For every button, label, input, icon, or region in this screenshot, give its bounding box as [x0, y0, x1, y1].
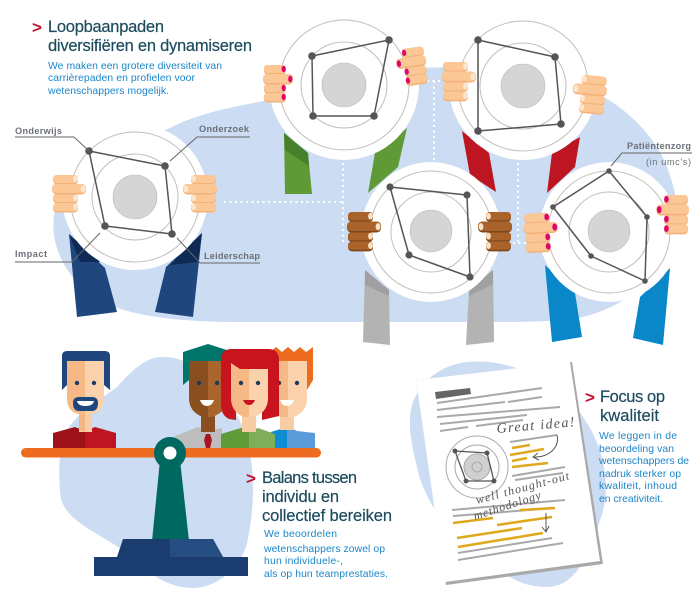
- text: balance body: hun individuele-,: [264, 556, 343, 567]
- figure: man with tie: [175, 344, 233, 448]
- heading: balance: Balans tussen: [262, 469, 357, 487]
- text: career paths body: [47, 61, 222, 97]
- heading: quality: >: [585, 388, 595, 407]
- text: balance body: We beoordelen: [264, 529, 337, 540]
- text: career paths body: wetenschappers mogelijk.: [47, 86, 169, 97]
- document: [416, 362, 603, 585]
- handwritten notes: [472, 415, 575, 532]
- label: Patiëntenzorg: (in umc's): [646, 157, 691, 167]
- panel: arms: [69, 128, 670, 345]
- handwritten notes: well thought-out: [474, 468, 571, 507]
- mini radar chart: [446, 436, 508, 498]
- label: Onderwijs: Onderwijs: [15, 126, 62, 136]
- figure: man with beard: [53, 351, 116, 448]
- heading: balance: individu en: [262, 488, 339, 506]
- dotted connectors: [224, 81, 526, 245]
- figure: man with orange hair: [270, 347, 315, 448]
- plate: blue figure: [539, 162, 679, 302]
- label: Patiëntenzorg: [611, 141, 692, 167]
- document heading bar: [435, 388, 471, 399]
- label: Onderzoek: [170, 124, 250, 161]
- label: Onderzoek: Onderzoek: [199, 124, 250, 134]
- background blob: career paths: [53, 67, 678, 322]
- heading: quality: Focus op: [600, 388, 665, 406]
- hands: light skin: [52, 62, 608, 212]
- heading: career paths: >: [32, 18, 42, 37]
- hands: pink nails: [263, 46, 689, 253]
- text: quality body: nadruk sterker op: [599, 469, 681, 480]
- heading: balance: collectief bereiken: [262, 507, 392, 525]
- heading: balance: >: [246, 469, 256, 488]
- arms: green: [284, 128, 407, 194]
- heading: quality: kwaliteit: [600, 407, 659, 425]
- text: balance body: als op hun teamprestaties.: [264, 569, 388, 580]
- text: quality body: [598, 431, 689, 505]
- label: Impact: [15, 233, 100, 262]
- label: Leiderschap: [177, 238, 260, 263]
- arms: red: [462, 131, 580, 193]
- heading: career paths: [32, 18, 252, 55]
- label: Onderwijs: [15, 126, 89, 151]
- text: quality body: en creativiteit.: [599, 494, 663, 505]
- background blob: balance: [59, 357, 253, 588]
- text: quality body: kwaliteit, inhoud: [599, 481, 677, 492]
- plate: navy figure: [62, 124, 208, 270]
- hands: brown skin: [347, 212, 512, 251]
- heading: career paths: diversifiëren en dynamiseren: [48, 37, 252, 55]
- text: quality body: wetenschappers de: [598, 456, 689, 467]
- document highlights: [453, 445, 555, 547]
- handwritten notes: Great idea!: [496, 415, 575, 437]
- text: career paths body: carrièrepaden en profielen voor: [48, 73, 196, 84]
- label: Impact: Impact: [15, 249, 47, 259]
- text: balance body: wetenschappers zowel op: [263, 544, 385, 555]
- balance scale: [21, 437, 321, 576]
- text: balance body: [263, 529, 388, 580]
- arms: blue: [545, 265, 670, 345]
- text: career paths body: We maken een grotere diversiteit van: [48, 61, 222, 72]
- plate: grey figure: [361, 162, 501, 302]
- text: quality body: We leggen in de: [599, 431, 677, 442]
- document text lines: [437, 388, 565, 560]
- plate: red figure: [449, 12, 597, 160]
- label: Patiëntenzorg: Patiëntenzorg: [627, 141, 691, 151]
- plate: green figure: [269, 10, 419, 160]
- handwritten notes: methodology: [472, 488, 543, 523]
- text: quality body: beoordeling van: [599, 444, 674, 455]
- figure: woman with red hair: [221, 349, 279, 448]
- arms: grey: [363, 270, 494, 345]
- heading: career paths: Loopbaanpaden: [48, 18, 164, 36]
- heading: balance: [246, 469, 392, 525]
- background blob: quality: [410, 362, 606, 587]
- label: Leiderschap: Leiderschap: [204, 251, 260, 261]
- arms: navy: [69, 233, 202, 317]
- heading: quality: [585, 388, 665, 425]
